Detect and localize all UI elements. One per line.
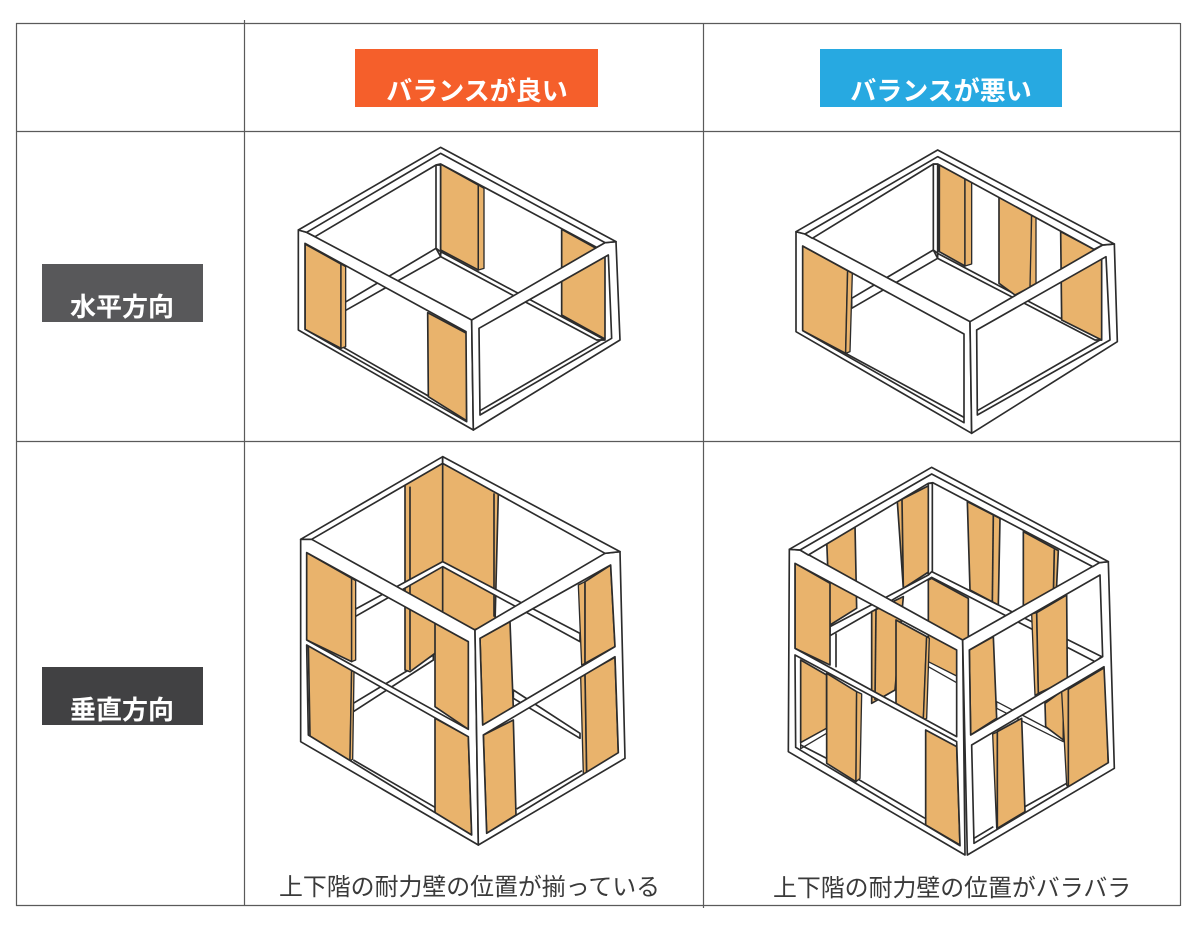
diagram: one-storey frame, balanced walls [298, 147, 620, 430]
diagram: two-storey frame, misaligned walls [788, 467, 1114, 855]
row label: horizontal direction [42, 264, 203, 322]
caption: walls misaligned: 上下階の耐力壁の位置がバラバラ [773, 875, 1131, 902]
heading: bad balance: バランスが悪い [850, 76, 1032, 106]
diagram: one-storey frame, unbalanced walls [796, 150, 1117, 433]
heading: good balance [355, 49, 598, 107]
heading: bad balance [820, 49, 1062, 107]
caption: walls aligned: 上下階の耐力壁の位置が揃っている [279, 874, 660, 901]
diagram: two-storey frame, aligned walls [301, 457, 625, 845]
row label: horizontal direction: 水平方向 [70, 292, 174, 322]
row label: vertical direction: 垂直方向 [70, 695, 174, 725]
row label: vertical direction [42, 667, 203, 725]
heading: good balance: バランスが良い [386, 76, 568, 106]
